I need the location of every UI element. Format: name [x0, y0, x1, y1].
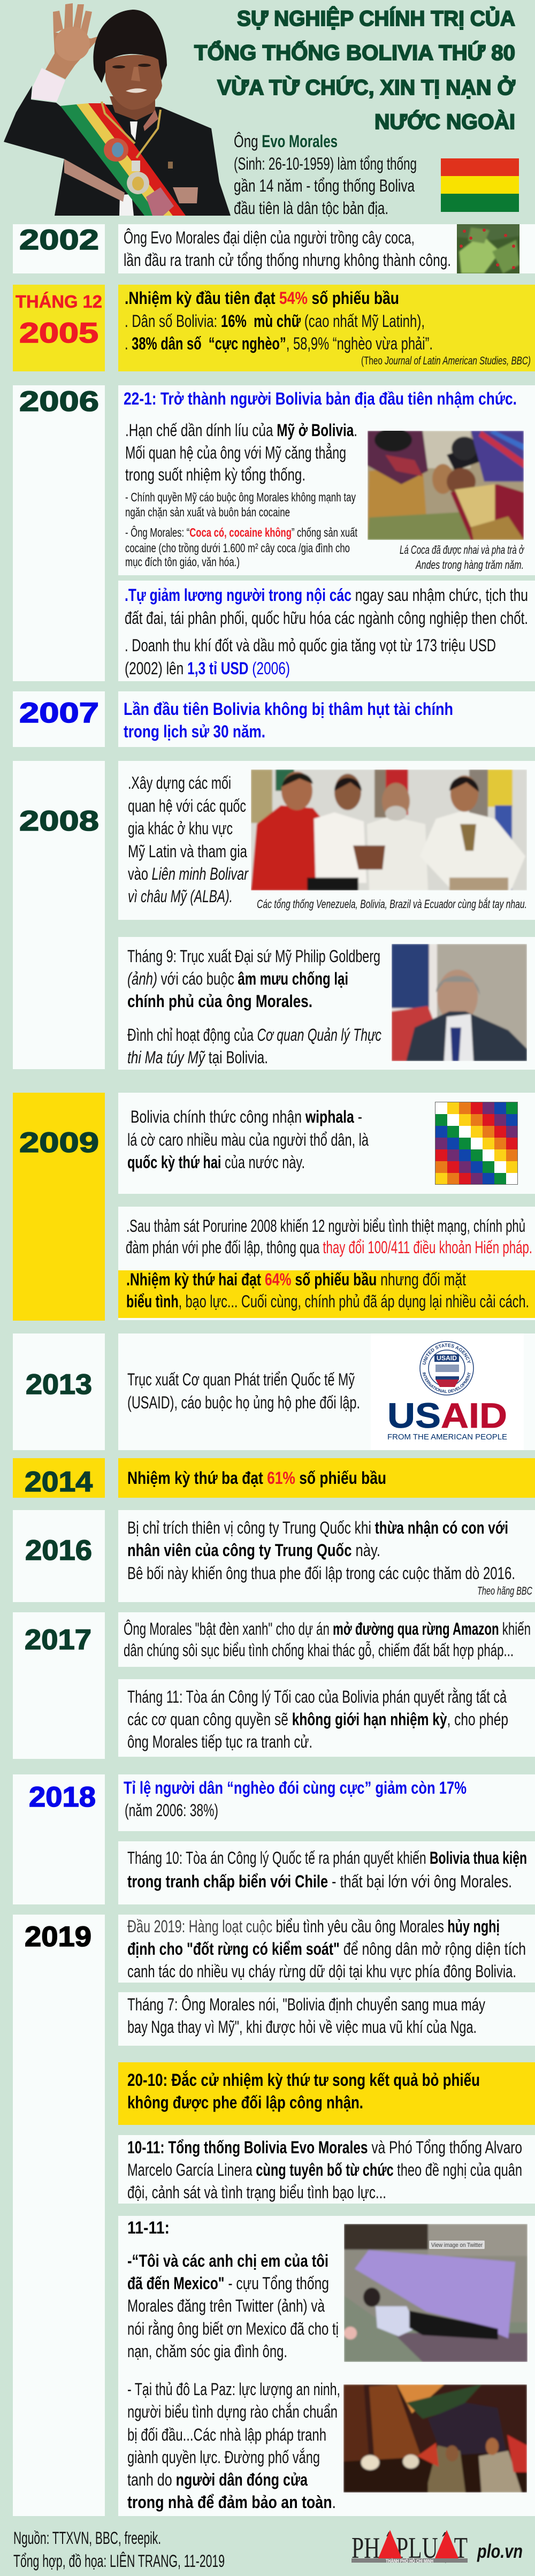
- text: expels US ambassador: Tháng 9: Trục xuất Đại sứ Mỹ Philip Goldberg: [127, 947, 380, 966]
- text: poverty rate: [124, 1778, 467, 1820]
- year 2007: 2007: [19, 697, 99, 729]
- panel: 2017: [13, 1612, 535, 1759]
- logo: USAID: FROM THE AMERICAN PEOPLE: [387, 1432, 507, 1442]
- year 2002: 2002: [19, 224, 99, 256]
- title: [194, 6, 516, 134]
- year 2008: 2008: [19, 805, 99, 837]
- text: limits US involvement: .Hạn chế dần dính líu của Mỹ ở Bolivia.: [125, 421, 357, 440]
- text: court ruling: ông Morales tiếp tục ra tranh cử.: [127, 1732, 312, 1751]
- year 2019: 2019: [25, 1921, 91, 1953]
- icon: Bolivia flag: [441, 158, 519, 212]
- footer credits: Nguồn: TTXVN, BBC, freepik.: [13, 2528, 161, 2548]
- panel: 2018: [13, 1774, 535, 1904]
- text: limits US involvement: - Chính quyền Mỹ cáo buộc ông Morales không mạnh tay: [125, 490, 356, 504]
- text: expels USAID: Trục xuất Cơ quan Phát triển Quốc tế Mỹ: [127, 1370, 355, 1389]
- year 2016: 2016: [25, 1535, 92, 1566]
- text: ALBA relations: quan hệ với các quốc: [128, 796, 246, 816]
- text: salary cuts and gas revenue: [125, 585, 528, 678]
- text: forest fires: [127, 1917, 526, 1981]
- panel: December 2005: [13, 285, 535, 371]
- footer credits: Tổng hợp, đồ họa: LIÊN TRANG, 11-2019: [13, 2551, 225, 2571]
- text: first term: . Dân số Bolivia: 16% mù chữ (cao nhất Mỹ Latinh),: [125, 311, 425, 331]
- date: December 2005: 2005: [19, 317, 98, 349]
- text: wiphala: Bolivia chính thức công nhận wiphala -: [131, 1107, 362, 1126]
- text: La Paz unrest: [127, 2380, 340, 2512]
- text: expels US ambassador: [127, 947, 381, 1067]
- logo: USAID: [387, 1341, 507, 1442]
- text: first term: .Nhiệm kỳ đầu tiên đạt 54% số phiếu bầu: [125, 288, 399, 308]
- intro text: Ông Evo Morales: [234, 132, 338, 151]
- logo: USAID: USAID: [437, 1354, 457, 1362]
- photo: Morales under a mosquito net: View image on Twitter: [431, 2242, 483, 2249]
- text: first term: . 38% dân số “cực nghèo”, 58,9% “nghèo vừa phải”.: [125, 334, 433, 353]
- icon: wiphala flag: [435, 1102, 518, 1185]
- date: December 2005: [16, 292, 102, 349]
- text: salary cuts and gas revenue: (2002) lên 1,3 tỉ USD (2006): [125, 659, 290, 678]
- text: no fiscal deficit: Lần đầu tiên Bolivia không bị thâm hụt tài chính: [124, 699, 453, 719]
- text: limits US involvement: - Ông Morales: “Coca có, cocaine không” chống sản xuất: [125, 525, 357, 539]
- text: scandal: [127, 1518, 533, 1597]
- title: NƯỚC NGOÀI: [374, 109, 515, 134]
- photo: Morales under a mosquito net: [344, 2224, 528, 2362]
- text: limits US involvement: cocaine (cho trồng dưới 1.600 m² cây coca /gia đình cho: [125, 541, 350, 555]
- text: fourth term: [127, 2070, 480, 2112]
- text: scandal: nhân viên của công ty Trung Quốc này.: [127, 1541, 380, 1560]
- text: no fiscal deficit: trong lịch sử 30 năm.: [124, 722, 265, 741]
- logo: Pháp Luật plo.vn: PHÁPLUẬT: [351, 2532, 468, 2565]
- panel: 2006: [13, 385, 535, 681]
- photo: coca plant: [457, 224, 519, 273]
- photo: protesters in La Paz: [343, 2384, 527, 2493]
- portrait: Evo Morales waving: [4, 3, 231, 216]
- logo: Pháp Luật plo.vn: plo.vn: [477, 2540, 523, 2562]
- text: forest fires: Đầu 2019: Hàng loạt cuộc biểu tình yêu cầu ông Morales hủy nghị: [127, 1917, 500, 1936]
- panel: 2013: [13, 1333, 535, 1450]
- intro text: (Sinh: 26-10-1959) làm tổng thống: [234, 154, 417, 173]
- year 2009: 2009: [19, 1127, 99, 1159]
- text: expels US ambassador: Đình chỉ hoạt động của Cơ quan Quản lý Thực: [127, 1025, 381, 1045]
- text: expels US ambassador: chính phủ của ông Morales.: [127, 992, 312, 1011]
- logo: USAID: UNITED STATES AGENCY: [422, 1343, 471, 1365]
- text: wiphala: lá cờ caro nhiều màu của người thổ dân, là: [127, 1130, 369, 1149]
- title: SỰ NGHIỆP CHÍNH TRỊ CỦA: [237, 6, 515, 31]
- text: wiphala: [127, 1107, 369, 1172]
- text: asylum in Mexico: nạn, chăm sóc gia đình ông.: [127, 2342, 287, 2361]
- text: resignation: [127, 2138, 522, 2202]
- date: December 2005: THÁNG 12: [16, 292, 102, 311]
- text: La Paz unrest: tanh do người dân đóng cửa: [127, 2470, 308, 2489]
- text: wiphala: quốc kỳ thứ hai của nước này.: [127, 1153, 305, 1172]
- photo: indigenous women with coca leaves: [368, 428, 524, 540]
- panel: 2007: [13, 691, 535, 747]
- text: Chile maritime ruling: [127, 1848, 527, 1891]
- text: limits US involvement: Mối quan hệ của ông với Mỹ căng thẳng: [125, 443, 346, 462]
- text: La Paz unrest: trong nhà để đảm bảo an toàn.: [127, 2493, 336, 2512]
- logo: Pháp Luật plo.vn: THÀNH PHỐ HỒ CHÍ MINH: [386, 2558, 433, 2564]
- text: La Paz unrest: bị đối đầu...Các nhà lập pháp tranh: [127, 2425, 326, 2444]
- footer credits: [13, 2528, 225, 2571]
- intro text: gần 14 năm - tổng thống Boliva: [234, 176, 415, 195]
- text: limits US involvement: mục đích tôn giáo, văn hóa.): [125, 555, 240, 569]
- intro text: đầu tiên là dân tộc bản địa.: [234, 199, 388, 218]
- logo: USAID: USAID: [387, 1396, 507, 1435]
- year 2006: 2006: [19, 386, 99, 417]
- text: ALBA relations: .Xây dựng các mối: [128, 773, 231, 792]
- panel: 2002: [13, 224, 535, 273]
- title: VỪA TỪ CHỨC, XIN TỊ NẠN Ở: [217, 75, 516, 100]
- text: asylum in Mexico: [127, 2218, 339, 2361]
- year 2017: 2017: [25, 1624, 91, 1656]
- photo: four presidents shaking hands: [251, 769, 527, 890]
- text: expels US ambassador: (ảnh) với cáo buộc âm mưu chống lại: [127, 969, 348, 988]
- panel: 2009: [13, 1093, 535, 1321]
- text: La Paz unrest: giành quyền lực. Đường phố vắng: [127, 2448, 320, 2467]
- text: third term: Nhiệm kỳ thứ ba đạt 61% số phiếu bầu: [127, 1468, 386, 1488]
- year 2018: 2018: [29, 1781, 96, 1813]
- text: expels USAID: [127, 1370, 360, 1412]
- text: 2002: Ông Evo Morales đại diện của người trồng cây coca,: [124, 228, 415, 247]
- text: no fiscal deficit: [124, 699, 453, 741]
- text: expels US ambassador: thi Ma túy Mỹ tại Bolivia.: [127, 1048, 268, 1067]
- text: ALBA relations: [128, 773, 249, 906]
- text: limits US involvement: ngăn chặn sản xuất và buôn bán cocaine: [125, 505, 290, 519]
- text: asylum in Mexico: Morales đăng trên Twitter (ảnh) và: [127, 2296, 325, 2315]
- panel: 2016: [13, 1510, 535, 1602]
- text: Amazon road: [124, 1619, 531, 1660]
- text: 2002: [124, 228, 451, 270]
- text: ALBA relations: vì châu Mỹ (ALBA).: [128, 887, 233, 906]
- text: asylum in Mexico: nói rằng ông biết ơn Mexico đã cho tị: [127, 2319, 339, 2338]
- logo: USAID: INTERNATIONAL DEVELOPMENT: [423, 1372, 471, 1393]
- text: expels USAID: (USAID), cáo buộc họ ủng hộ phe đối lập.: [127, 1393, 360, 1412]
- year 2014: 2014: [25, 1466, 93, 1498]
- text: Russian planes: [127, 1995, 485, 2037]
- text: asylum in Mexico: 11-11:: [127, 2218, 170, 2237]
- text: asylum in Mexico: đã đến Mexico" - cựu Tổng thống: [127, 2274, 329, 2293]
- text: ALBA relations: vào Liên minh Bolivar: [128, 864, 249, 883]
- text: limits US involvement: trong suốt nhiệm kỳ tổng thống.: [125, 465, 305, 484]
- photo: Philip Goldberg: [392, 944, 527, 1061]
- text: fourth term: không được phe đối lập công nhận.: [127, 2093, 363, 2112]
- year 2013: 2013: [26, 1369, 92, 1400]
- text: poverty rate: (năm 2006: 38%): [125, 1801, 218, 1820]
- text: La Paz unrest: - Tại thủ đô La Paz: lực lượng an ninh,: [127, 2380, 340, 2399]
- panel: 2019: [13, 1915, 535, 2516]
- photo caption: [400, 543, 524, 571]
- text: court ruling: [127, 1687, 508, 1751]
- text: court ruling: các cơ quan công quyền sẽ không giới hạn nhiệm kỳ, cho phép: [127, 1710, 508, 1729]
- title: TỔNG THỐNG BOLIVIA THỨ 80: [194, 40, 515, 65]
- text: La Paz unrest: người biểu tình dựng rào chắn chuẩn: [127, 2402, 338, 2421]
- text: first term: [125, 288, 531, 367]
- text: ALBA relations: Mỹ Latin và tham gia: [128, 842, 247, 861]
- text: limits US involvement: [125, 421, 357, 569]
- panel: 2008: [13, 761, 535, 1070]
- text: second term: [126, 1270, 529, 1311]
- text: second term: .Nhiệm kỳ thứ hai đạt 64% số phiếu bầu nhưng đối mặt: [126, 1270, 466, 1289]
- panel: 2014: [13, 1458, 535, 1498]
- text: asylum in Mexico: -“Tôi và các anh chị em của tôi: [127, 2251, 328, 2270]
- text: Porurine massacre and constitution: [126, 1216, 532, 1257]
- text: ALBA relations: gia khác ở khu vực: [128, 819, 233, 838]
- intro text: [234, 132, 417, 218]
- text: resignation: đội, cảnh sát và tình trạng biểu tình bạo lực...: [127, 2183, 386, 2202]
